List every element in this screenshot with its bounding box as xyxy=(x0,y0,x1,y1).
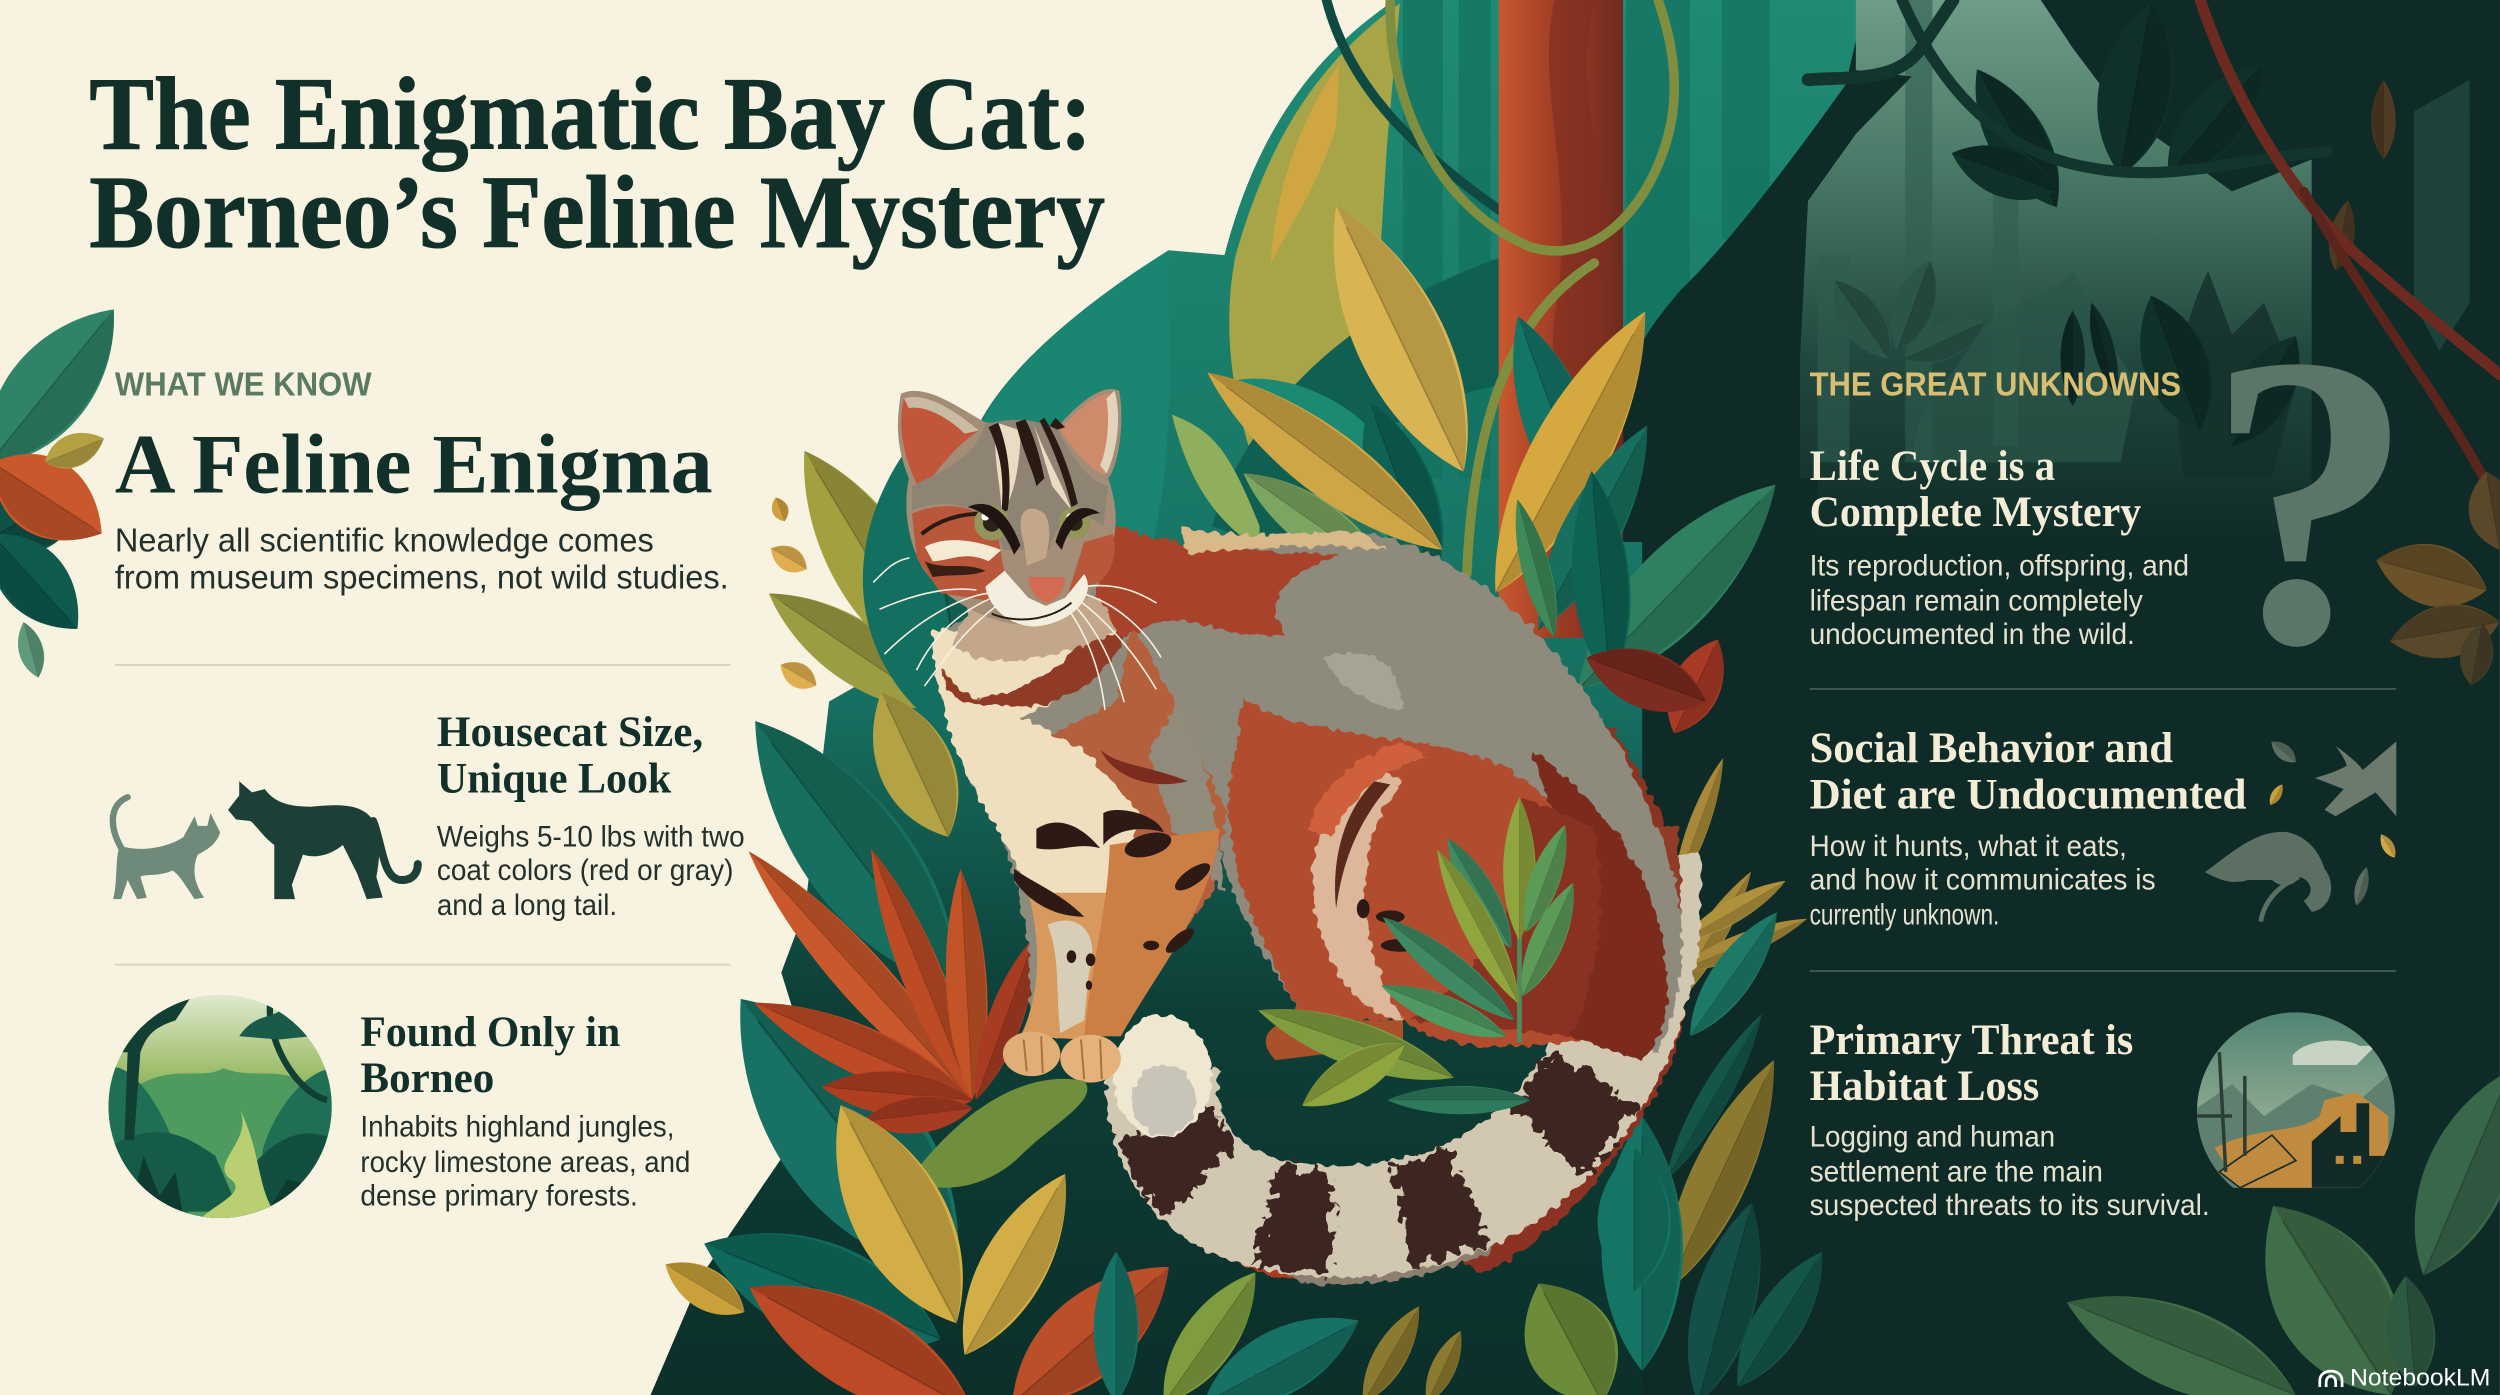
foreground bottom leaves xyxy=(655,1083,1843,1395)
icon: habitat loss circle xyxy=(2197,1012,2396,1188)
block: found only in borneo: Inhabits highland jungles, xyxy=(360,1111,674,1144)
block: primary threat xyxy=(1810,1017,2210,1222)
bay cat head xyxy=(898,389,1121,627)
bay cat tail xyxy=(1113,749,1664,1273)
icon: prey silhouettes xyxy=(2205,736,2400,921)
branch xyxy=(909,1079,1087,1188)
block: life cycle: lifespan remain completely xyxy=(1810,585,2143,618)
block: housecat size: and a long tail. xyxy=(437,889,617,922)
leaves behind the cat xyxy=(686,305,1625,1384)
block: found only in borneo: rocky limestone areas, and xyxy=(360,1146,690,1179)
block: social behavior: currently unknown. xyxy=(1810,899,1999,932)
intro text xyxy=(115,523,729,596)
bay cat body xyxy=(933,526,1682,1060)
block: life cycle: Complete Mystery xyxy=(1810,489,2142,536)
left edge leaf cluster xyxy=(0,284,145,681)
dim leaves right edge xyxy=(2368,467,2500,688)
block: primary threat: Primary Threat is xyxy=(1810,1017,2133,1064)
panel: the great unknowns xyxy=(1810,270,2490,1391)
block: social behavior xyxy=(1810,725,2246,932)
jungle backdrop xyxy=(651,0,1865,1395)
panel: what we know xyxy=(108,366,745,1228)
red fern left of cat xyxy=(730,834,1052,1140)
icon: borneo jungle circle xyxy=(108,995,335,1228)
cat front legs xyxy=(1003,829,1403,1083)
block: life cycle: Its reproduction, offspring, and xyxy=(1810,550,2189,583)
front plant over cat haunch xyxy=(1251,797,1588,1123)
block: primary threat: Logging and human xyxy=(1810,1120,2055,1153)
trunk streaks xyxy=(1549,0,1603,510)
block: life cycle: Life Cycle is a xyxy=(1810,443,2055,490)
block: housecat size xyxy=(437,709,745,922)
block: found only in borneo: Borneo xyxy=(360,1055,494,1102)
question mark: ? xyxy=(2206,270,2415,732)
notebooklm mark: NotebookLM xyxy=(2350,1364,2490,1391)
dark right panel xyxy=(1658,0,2500,1395)
block: housecat size: coat colors (red or gray) xyxy=(437,854,733,887)
block: primary threat: Habitat Loss xyxy=(1810,1063,2039,1110)
misty forest window xyxy=(1794,0,2312,542)
block: found only in borneo xyxy=(360,1009,690,1212)
olive vine xyxy=(1390,0,1674,574)
block: social behavior: How it hunts, what it eats, xyxy=(1810,830,2127,863)
block: housecat size: Housecat Size, xyxy=(437,709,703,756)
eyebrow: great unknowns: THE GREAT UNKNOWNS xyxy=(1810,366,2181,403)
cat markings xyxy=(1014,749,1419,990)
heading: a feline enigma: A Feline Enigma xyxy=(115,419,713,512)
small falling leaves xyxy=(765,495,822,696)
dark tree silhouette and canopy xyxy=(1623,0,2500,1395)
eyebrow: what we know: WHAT WE KNOW xyxy=(115,366,372,403)
block: found only in borneo: Found Only in xyxy=(360,1009,620,1056)
block: found only in borneo: dense primary forests. xyxy=(360,1179,638,1212)
title: Borneo’s Feline Mystery xyxy=(89,156,1105,270)
vines xyxy=(1327,0,2500,510)
block: housecat size: Unique Look xyxy=(437,755,671,802)
canopy leaves xyxy=(1943,0,2396,461)
tree trunk xyxy=(1499,0,1623,638)
block: social behavior: and how it communicates is xyxy=(1810,864,2156,897)
block: life cycle xyxy=(1810,443,2189,651)
block: primary threat: settlement are the main xyxy=(1810,1155,2103,1188)
whiskers xyxy=(874,558,1161,709)
intro text: from museum specimens, not wild studies. xyxy=(115,559,729,596)
title: The Enigmatic Bay Cat: xyxy=(89,57,1092,171)
gold leaves top xyxy=(1188,187,1805,717)
dim foreground leaves right xyxy=(2051,1054,2500,1395)
block: life cycle: undocumented in the wild. xyxy=(1810,618,2135,651)
block: social behavior: Diet are Undocumented xyxy=(1810,771,2246,818)
icon: cat size comparison xyxy=(113,781,418,899)
block: primary threat: suspected threats to its survival. xyxy=(1810,1189,2210,1222)
right-hand plants xyxy=(1576,629,1811,1371)
intro text: Nearly all scientific knowledge comes xyxy=(115,523,654,560)
block: housecat size: Weighs 5-10 lbs with two xyxy=(437,821,745,854)
title xyxy=(89,57,1105,270)
block: social behavior: Social Behavior and xyxy=(1810,725,2173,772)
